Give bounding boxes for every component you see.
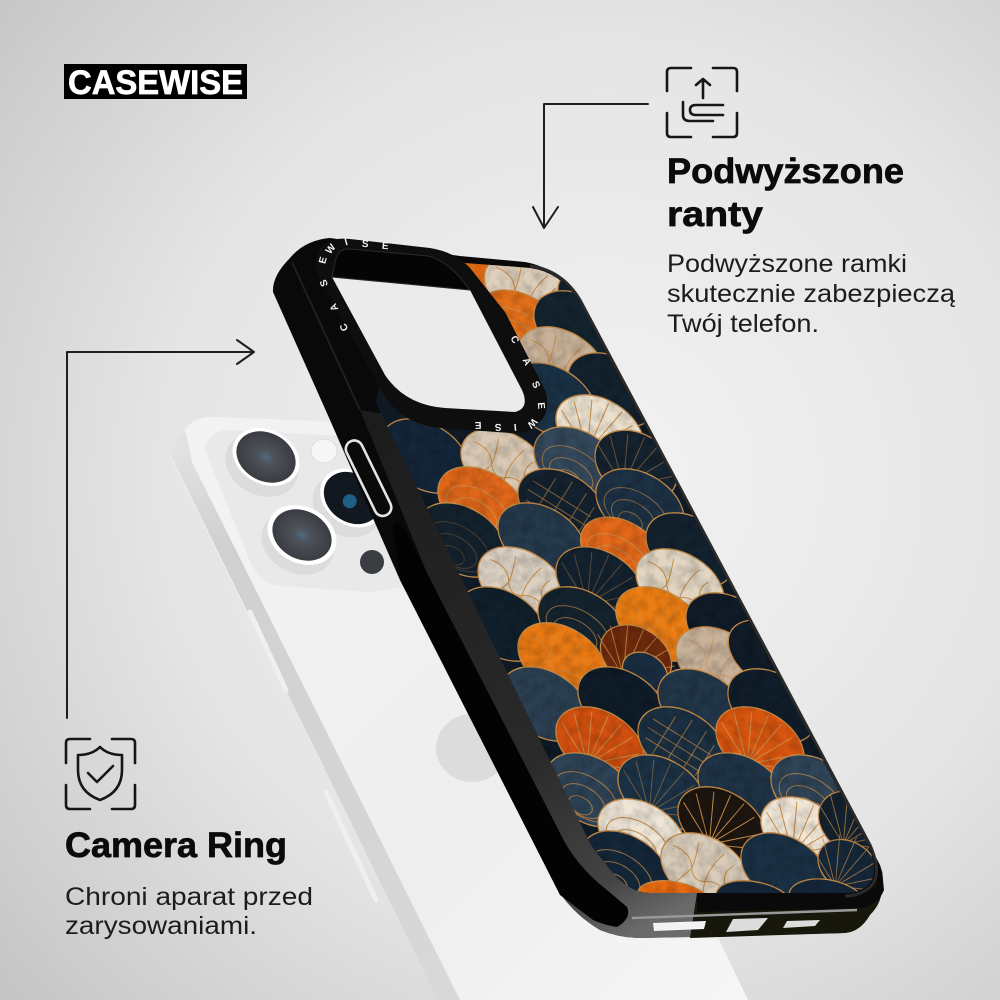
text: raised edges description: skutecznie zabezpieczą xyxy=(667,280,955,308)
side buttons xyxy=(250,612,376,900)
ring lettering: A xyxy=(328,301,341,313)
heading: camera ring: Camera Ring xyxy=(65,826,287,865)
bottom lip xyxy=(697,870,884,912)
lens 1 xyxy=(214,415,312,509)
logo: CASEWISE xyxy=(68,64,243,102)
ring frame xyxy=(316,239,547,433)
heading: raised edges: ranty xyxy=(667,195,764,234)
lens 3 xyxy=(250,492,349,587)
side highlight xyxy=(292,262,360,410)
ring lettering: S xyxy=(318,278,331,288)
text: camera ring description xyxy=(65,883,313,940)
ring lettering: E xyxy=(474,419,482,430)
ring lettering: W xyxy=(324,242,339,257)
text: camera ring description: Chroni aparat przed xyxy=(65,883,313,911)
ring lettering: E xyxy=(381,241,389,252)
text: raised edges description: Podwyższone ramki xyxy=(667,250,907,278)
bottom wall xyxy=(690,880,882,938)
camera ring xyxy=(316,237,547,433)
white phone xyxy=(172,415,748,1000)
case inner bevel xyxy=(360,410,700,938)
window inner wall xyxy=(332,249,470,290)
ring lettering: E xyxy=(317,255,330,265)
heading: raised edges: Podwyższone xyxy=(667,152,904,191)
ring lettering: W xyxy=(524,416,539,430)
ring lettering: C xyxy=(338,321,351,333)
heading: raised edges xyxy=(667,152,904,234)
apple logo shadow xyxy=(436,714,508,782)
ring lettering: I xyxy=(344,237,349,248)
ring lettering: E xyxy=(535,402,546,410)
ring lettering: S xyxy=(361,239,369,250)
printed scale pattern xyxy=(376,262,874,893)
arrow: raised edges pointer xyxy=(533,104,648,228)
ring lettering: C xyxy=(508,334,521,346)
ring lettering: A xyxy=(520,356,533,368)
ring lettering: I xyxy=(513,421,517,432)
text: raised edges description: Twój telefon. xyxy=(667,310,819,338)
phone side edge xyxy=(172,430,460,1000)
print edge xyxy=(530,266,876,896)
icon: raised edges xyxy=(667,68,737,137)
text: raised edges description xyxy=(667,250,955,338)
camera window xyxy=(332,277,525,412)
bottom highlight xyxy=(632,910,857,918)
port left xyxy=(653,921,706,931)
port middle xyxy=(726,918,768,932)
ring lettering xyxy=(317,237,546,432)
case body xyxy=(273,238,883,938)
flash xyxy=(311,439,337,463)
side slot xyxy=(393,523,628,927)
phone body xyxy=(172,417,748,1000)
camera plateau xyxy=(205,430,410,592)
ring lettering: S xyxy=(494,421,502,432)
arrow: camera ring pointer xyxy=(67,340,254,718)
lidar xyxy=(360,550,384,574)
text: camera ring description: zarysowaniami. xyxy=(65,912,257,940)
ring lettering: S xyxy=(529,380,542,391)
black case xyxy=(273,238,884,938)
port right xyxy=(783,920,820,928)
side button on case xyxy=(343,438,394,519)
icon: shield xyxy=(66,739,135,809)
lens 2 xyxy=(300,455,397,551)
